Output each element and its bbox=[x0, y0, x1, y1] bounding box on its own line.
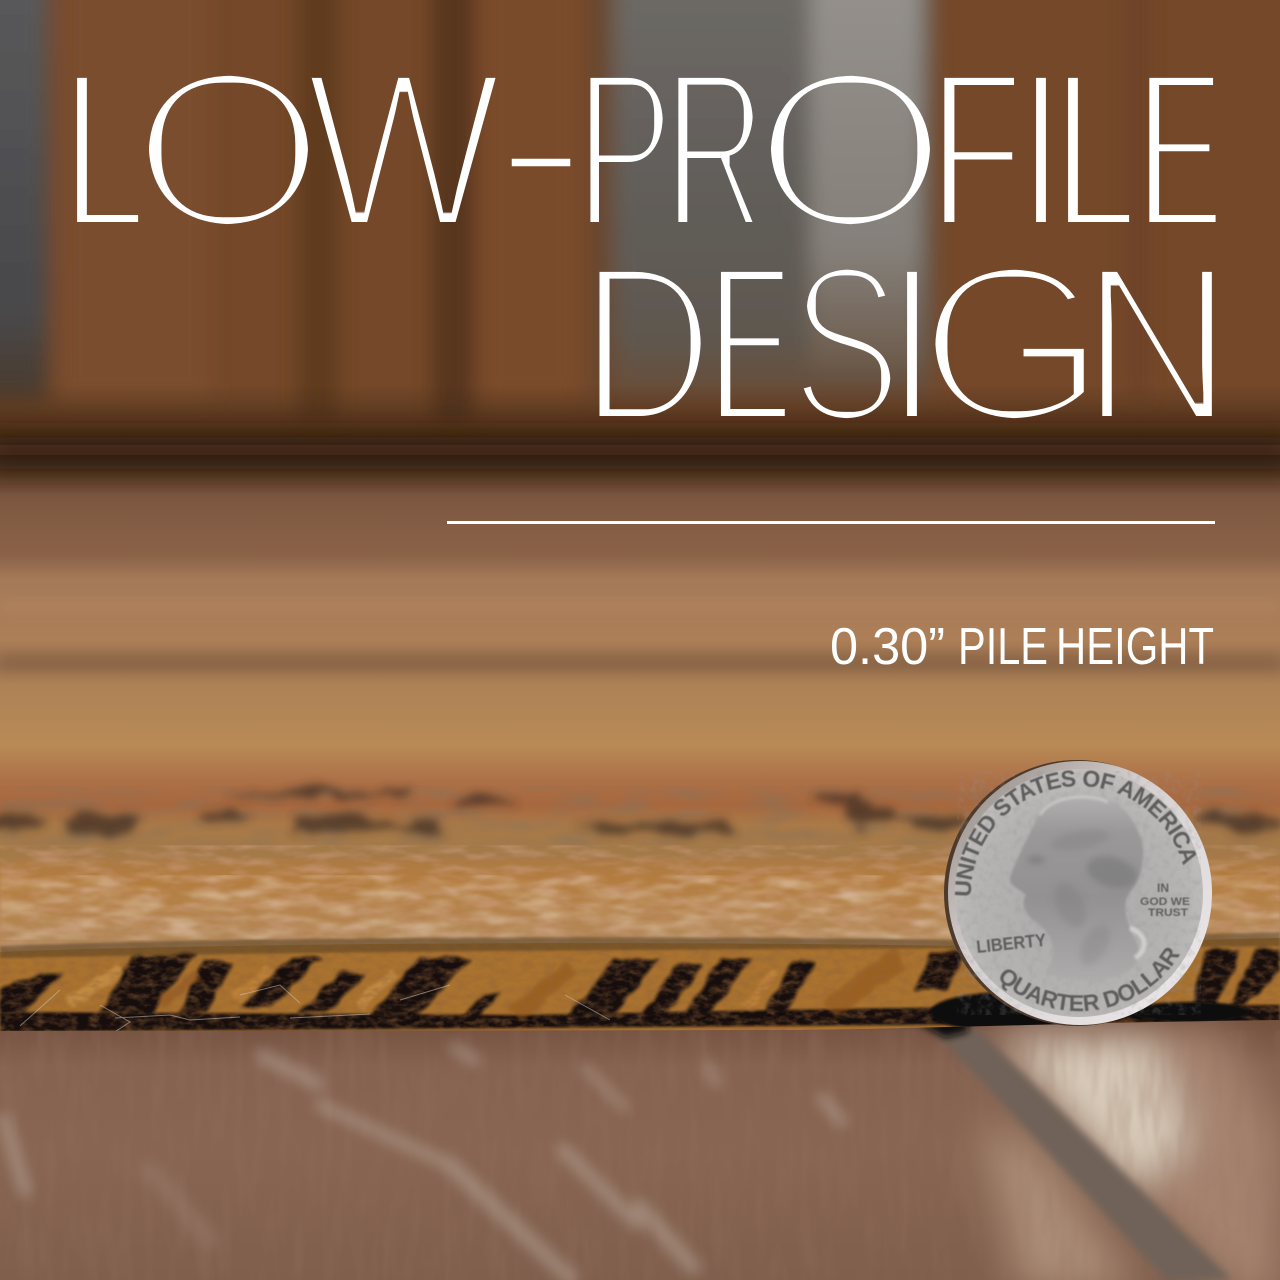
title line 1 bbox=[63, 20, 1222, 275]
floor bbox=[0, 1015, 1280, 1280]
floor highlight streaks bbox=[4, 1048, 842, 1278]
title line 2: S bbox=[791, 219, 901, 469]
subtitle: pile height: PILE bbox=[958, 618, 1048, 676]
subtitle: pile height: HEIGHT bbox=[1056, 618, 1214, 676]
title line 1: O bbox=[132, 25, 326, 275]
rug woven texture bbox=[0, 845, 1280, 950]
coin legends: GOD WE bbox=[1140, 896, 1190, 908]
title line 1: L bbox=[63, 25, 145, 275]
title line 1: O bbox=[754, 25, 948, 275]
title line 1: L bbox=[1054, 25, 1136, 275]
coin legends: IN bbox=[1157, 881, 1169, 895]
coin legends: LIBERTY bbox=[975, 930, 1047, 957]
title line 2: G bbox=[918, 219, 1108, 469]
coin legends: TRUST bbox=[1148, 907, 1188, 919]
title line 2: E bbox=[710, 219, 791, 469]
rug pale fleck band bbox=[0, 875, 1280, 940]
coin legends: QUARTER DOLLAR bbox=[1000, 947, 1180, 1012]
title line 1: P bbox=[576, 25, 673, 275]
hair knot and profile shading bbox=[1028, 832, 1138, 963]
braid top fuzz shadow bbox=[0, 932, 1280, 958]
dark shadow around coin base bbox=[929, 991, 1056, 1027]
title line 1: - bbox=[497, 20, 585, 270]
coin portrait bbox=[1010, 795, 1144, 981]
braid black underside bbox=[0, 1005, 1280, 1032]
title line 2: I bbox=[884, 219, 940, 469]
braid light orange strands bbox=[70, 958, 900, 1015]
title line 1: R bbox=[665, 25, 765, 275]
coin legends bbox=[954, 770, 1197, 1012]
floor plank right, bright reflection bbox=[980, 1030, 1280, 1280]
title bbox=[63, 20, 1233, 469]
title line 2: N bbox=[1081, 219, 1233, 469]
braid dark strands bbox=[0, 948, 1280, 1024]
quarter coin bbox=[944, 760, 1212, 1026]
rug dark pattern band bbox=[0, 789, 1280, 834]
coin legends: UNITED STATES OF AMERICA bbox=[954, 770, 1197, 896]
braid pale fibres bbox=[20, 985, 610, 1035]
title line 2 bbox=[581, 219, 1233, 469]
rug braided edge bbox=[0, 932, 1280, 1035]
rug mottled dark band bbox=[0, 785, 1280, 845]
braid fibre texture bbox=[0, 946, 1280, 1031]
rug surface bbox=[0, 437, 1280, 955]
title line 2: D bbox=[581, 219, 713, 469]
title line 1: W bbox=[304, 25, 503, 275]
title line 1: I bbox=[1013, 25, 1069, 275]
subtitle: pile height: 0.30” bbox=[830, 618, 945, 676]
background wall bbox=[0, 0, 1280, 480]
title line 1: F bbox=[930, 25, 1022, 275]
dark band where wall meets floor bbox=[0, 437, 1280, 469]
floor plank groove bbox=[934, 1030, 1232, 1280]
rug soft horizontal stripes bbox=[0, 600, 1280, 890]
